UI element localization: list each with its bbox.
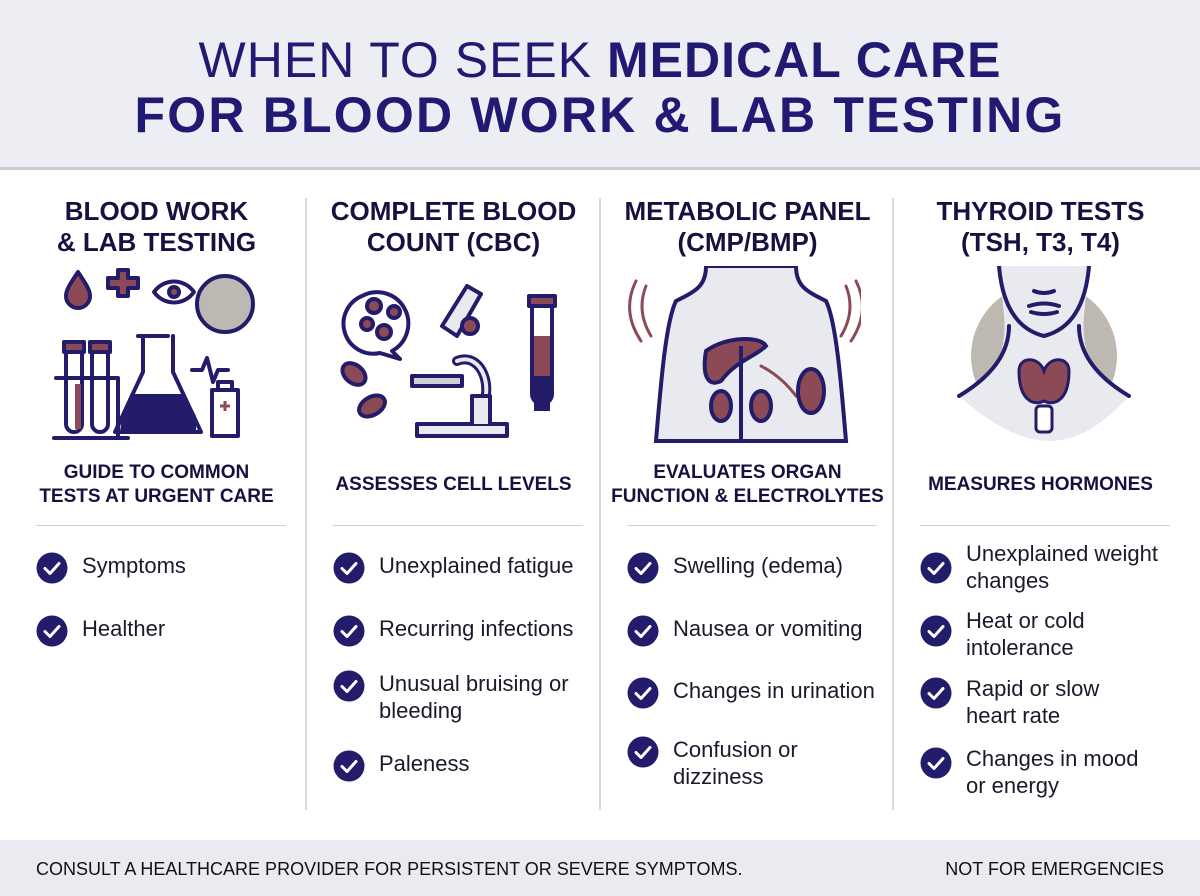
- heading: [936, 196, 1144, 257]
- footer: [0, 840, 1200, 896]
- item: [334, 750, 470, 782]
- checklist: [920, 541, 1158, 798]
- icon: torso with organs: [628, 266, 861, 443]
- heading: [624, 196, 871, 257]
- footer left text: CONSULT A HEALTHCARE PROVIDER FOR PERSISTENT OR SEVERE SYMPTOMS.: [36, 859, 742, 879]
- item: Rapid or slow heart rate: [966, 676, 1099, 728]
- item: Paleness: [379, 751, 470, 776]
- panel: complete blood count: [331, 196, 583, 782]
- item: Unusual bruising or bleeding: [379, 671, 569, 723]
- item: Symptoms: [82, 553, 186, 578]
- panel: thyroid tests: [920, 196, 1170, 798]
- item: Healther: [82, 616, 165, 641]
- panel: metabolic panel: [611, 196, 884, 789]
- checklist: [334, 552, 573, 782]
- title line 2: FOR BLOOD WORK & LAB TESTING: [134, 87, 1066, 143]
- checklist: [628, 552, 875, 789]
- item: Changes in mood or energy: [966, 746, 1138, 798]
- item: [36, 616, 165, 646]
- subtitle: GUIDE TO COMMON: [64, 462, 249, 483]
- footer right text: NOT FOR EMERGENCIES: [945, 859, 1164, 879]
- title line 1: WHEN TO SEEK MEDICAL CARE: [199, 32, 1001, 88]
- icon: neck with thyroid: [956, 266, 1132, 441]
- heading: COUNT (CBC): [367, 227, 540, 257]
- item: Changes in urination: [673, 678, 875, 703]
- item: Nausea or vomiting: [673, 616, 863, 641]
- subtitle: EVALUATES ORGAN: [653, 462, 842, 483]
- heading: [331, 196, 576, 257]
- item: Swelling (edema): [673, 553, 843, 578]
- item: [36, 552, 186, 584]
- heading: METABOLIC PANEL: [624, 196, 871, 226]
- heading: [57, 196, 256, 257]
- item: [334, 552, 573, 584]
- item: [628, 616, 863, 646]
- item: Confusion or dizziness: [673, 737, 798, 789]
- subtitle: MEASURES HORMONES: [928, 474, 1153, 495]
- heading: BLOOD WORK: [65, 196, 248, 226]
- item: Unexplained weight changes: [966, 541, 1158, 593]
- heading: (CMP/BMP): [677, 227, 818, 257]
- subtitle: FUNCTION & ELECTROLYTES: [611, 486, 884, 507]
- subtitle: TESTS AT URGENT CARE: [39, 486, 274, 507]
- checklist: [36, 552, 186, 646]
- header band: [0, 0, 1200, 170]
- item: Recurring infections: [379, 616, 573, 641]
- heading: & LAB TESTING: [57, 227, 256, 257]
- icon: lab equipment: [52, 268, 255, 440]
- panel: blood work & lab testing: [36, 196, 286, 646]
- item: [334, 616, 573, 646]
- icon: microscope: [340, 284, 557, 438]
- heading: COMPLETE BLOOD: [331, 196, 576, 226]
- heading: (TSH, T3, T4): [961, 227, 1120, 257]
- subtitle: ASSESSES CELL LEVELS: [335, 474, 572, 495]
- heading: THYROID TESTS: [936, 196, 1144, 226]
- subtitle: [39, 462, 274, 507]
- item: [628, 678, 875, 708]
- item: Unexplained fatigue: [379, 553, 573, 578]
- item: Heat or cold intolerance: [966, 608, 1085, 660]
- subtitle: [611, 462, 884, 507]
- item: [628, 552, 843, 584]
